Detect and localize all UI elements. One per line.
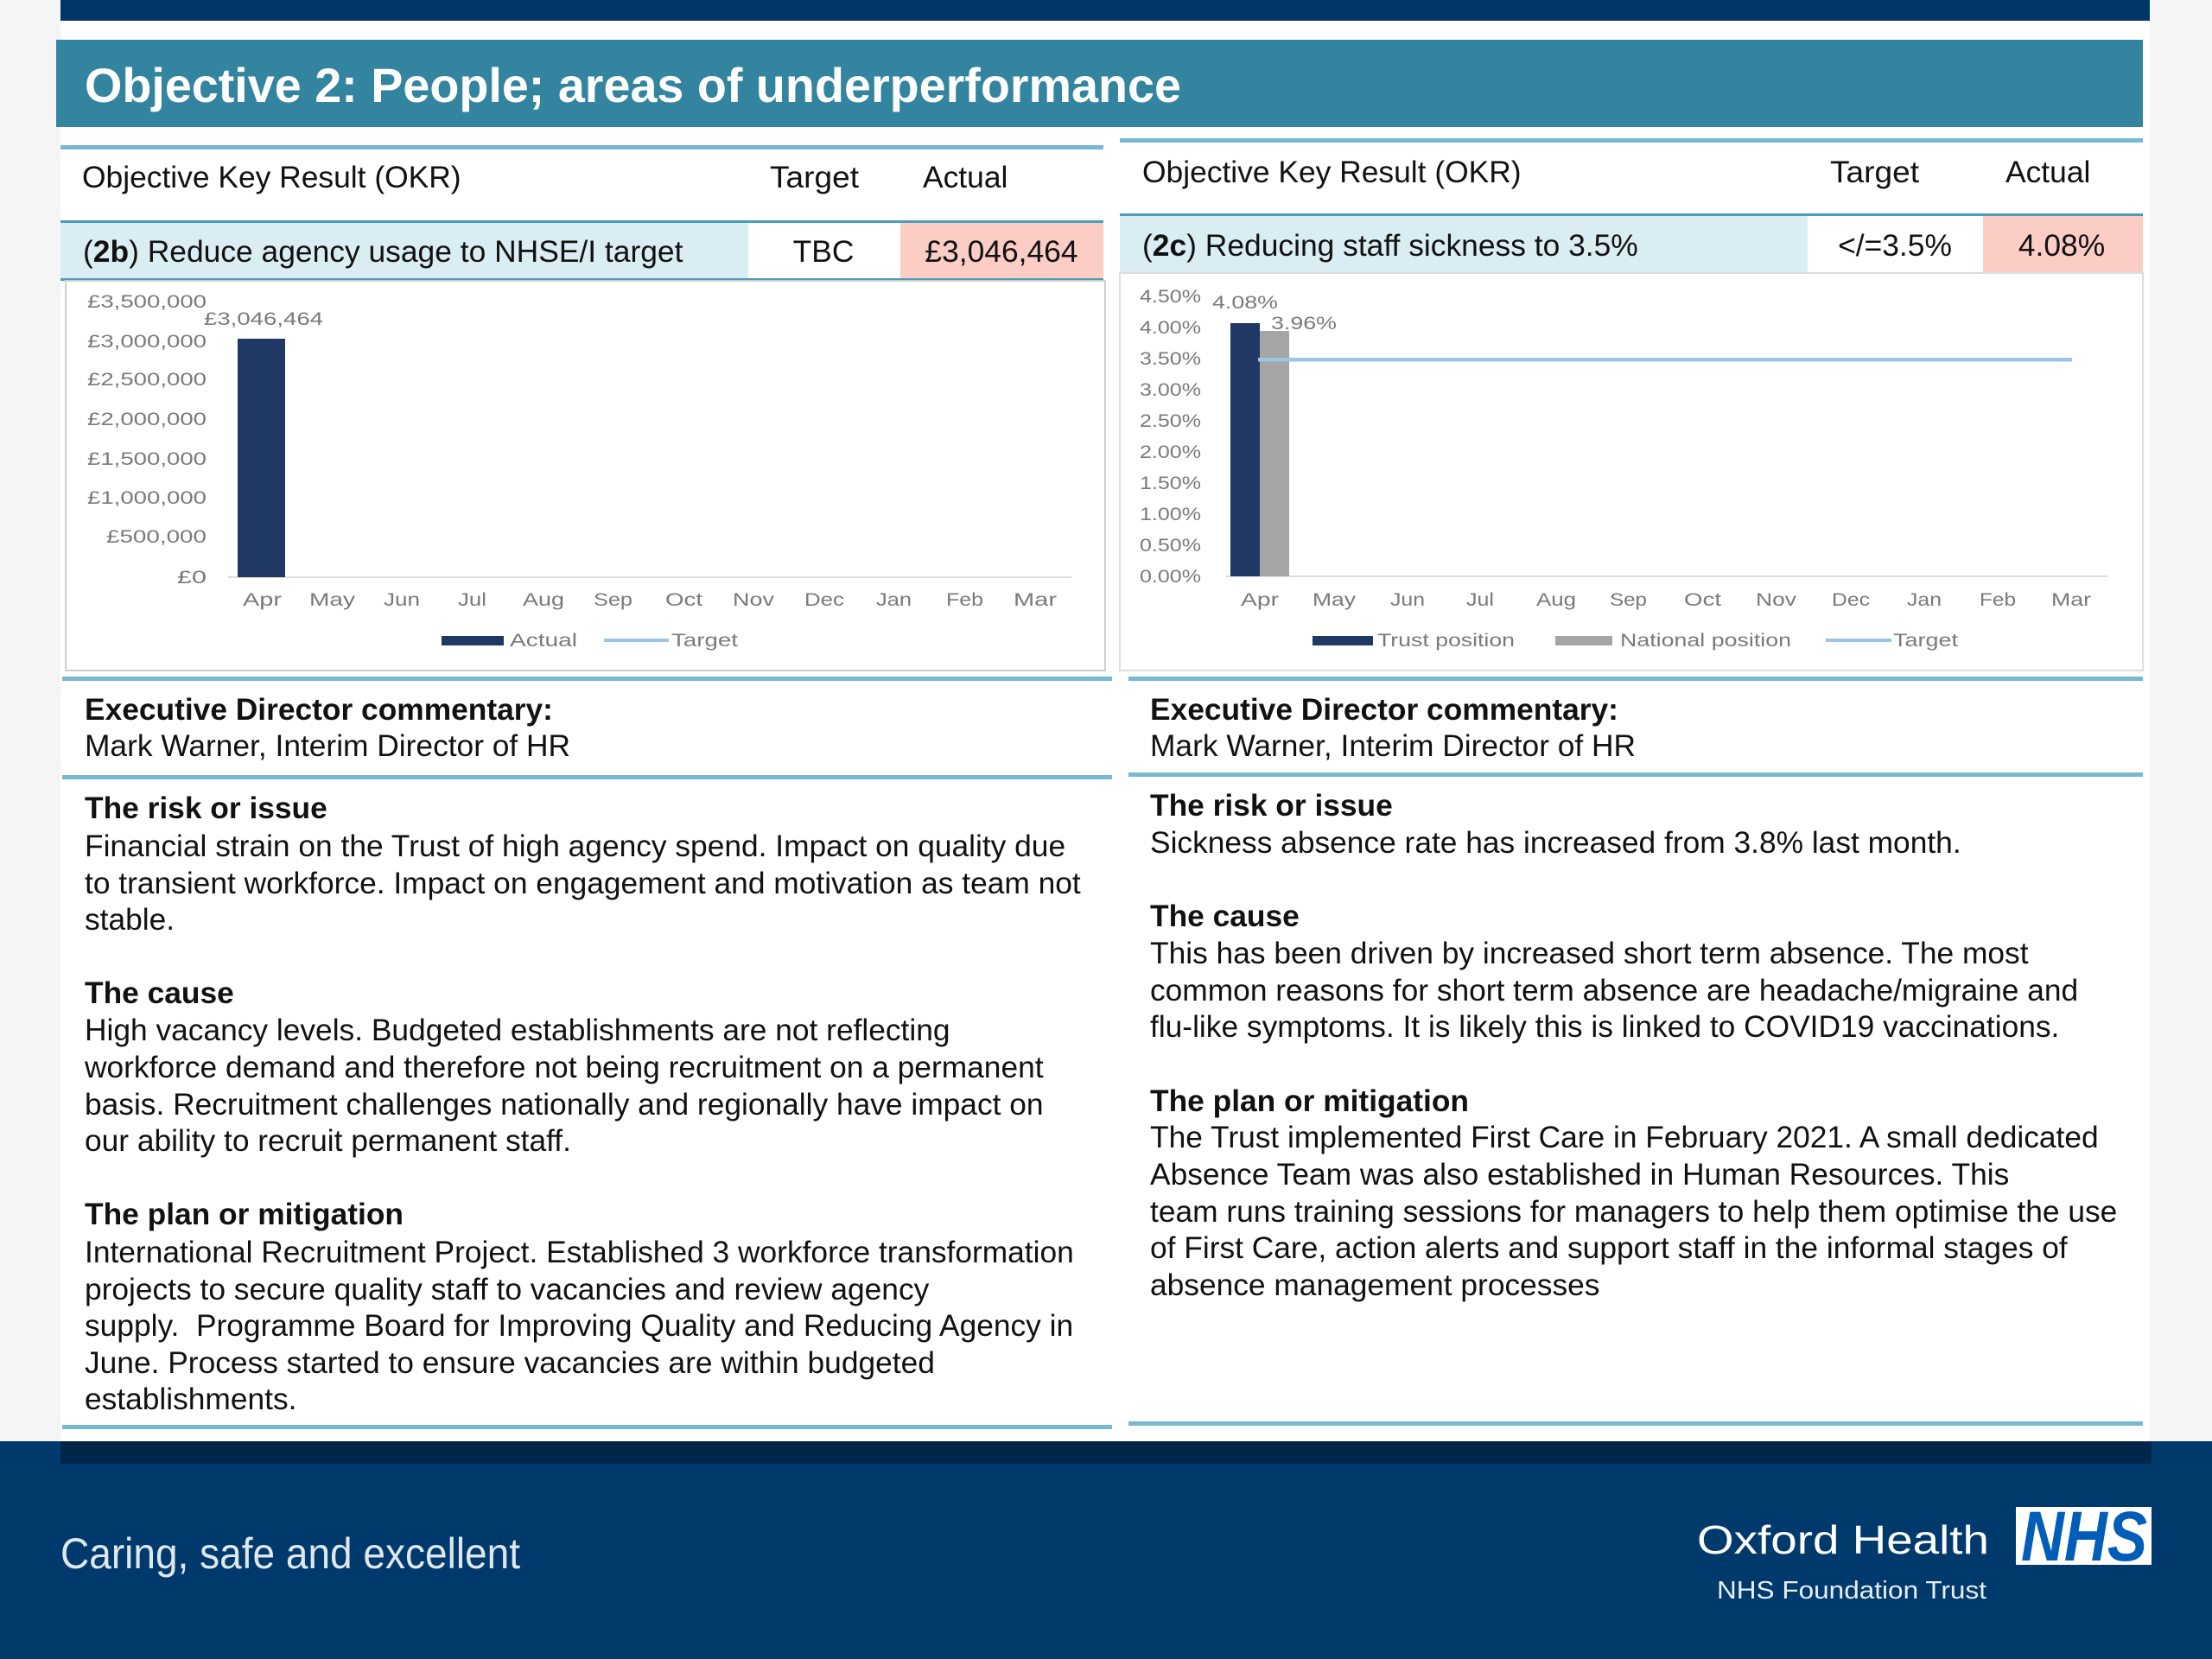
risk or issue 2b	[85, 791, 1081, 937]
chart legend: Actual	[510, 631, 577, 651]
executive director 2b: Mark Warner, Interim Director of HR	[85, 729, 570, 763]
executive director 2b: Executive Director commentary:	[85, 693, 553, 727]
plan or mitigation 2b: projects to secure quality staff to vacancies and review agency	[85, 1273, 930, 1306]
OKR 2b table header: Target	[770, 160, 859, 194]
y axis labels: 4.50%	[1140, 287, 1201, 307]
risk or issue 2b: to transient workforce. Impact on engagement and motivation as team not	[85, 867, 1081, 900]
y axis labels: 2.50%	[1140, 411, 1201, 431]
executive director 2c: Mark Warner, Interim Director of HR	[1150, 729, 1636, 763]
x axis months	[1241, 590, 2091, 610]
y axis labels: £1,500,000	[87, 449, 207, 469]
panel: commentary 2c	[1128, 677, 2143, 1426]
y axis labels: 0.00%	[1140, 567, 1201, 587]
risk or issue 2b: Financial strain on the Trust of high agency spend. Impact on quality due	[85, 830, 1065, 863]
top bar	[60, 0, 2150, 21]
cause 2b: basis. Recruitment challenges nationally and regionally have impact on	[85, 1088, 1044, 1122]
chart legend: Trust position	[1377, 631, 1515, 651]
OKR 2b table header: Objective Key Result (OKR)	[82, 160, 461, 194]
OKR 2c table header: Objective Key Result (OKR)	[1142, 155, 1522, 189]
chart legend: National position	[1620, 631, 1791, 651]
x axis months: Feb	[1980, 590, 2016, 610]
y axis labels: 3.00%	[1140, 380, 1201, 400]
y axis labels: 1.50%	[1140, 474, 1201, 493]
x axis months: Oct	[1684, 590, 1721, 610]
title banner	[56, 40, 2143, 127]
plan or mitigation 2b: June. Process started to ensure vacancies are within budgeted	[85, 1346, 935, 1380]
x axis months: Sep	[1610, 590, 1647, 610]
target line	[1258, 358, 2072, 361]
trust name: NHS Foundation Trust	[1717, 1577, 1986, 1605]
plan or mitigation 2c: absence management processes	[1150, 1268, 1599, 1302]
y axis labels: £0	[177, 568, 207, 588]
x axis months: Jul	[458, 590, 486, 610]
x axis months: Jan	[1907, 590, 1942, 610]
x axis months: Apr	[1241, 590, 1279, 610]
cause 2c: This has been driven by increased short term absence. The most	[1150, 937, 2029, 970]
x axis months	[243, 590, 1057, 610]
bar chart: agency spend	[66, 281, 1105, 671]
OKR 2b result row: £3,046,464	[925, 234, 1078, 269]
y axis labels: £2,000,000	[87, 410, 207, 429]
chart legend: Target	[671, 631, 738, 651]
plan or mitigation 2b: supply. Programme Board for Improving Quality and Reducing Agency in	[85, 1309, 1073, 1343]
bar: April actual	[238, 339, 285, 577]
trust name	[1697, 1517, 1989, 1605]
title banner: Objective 2: People; areas of underperformance	[85, 58, 1181, 112]
x axis months: Mar	[2051, 590, 2091, 610]
x axis months: Dec	[1832, 590, 1870, 610]
chart legend: Target	[1893, 631, 1958, 651]
y axis labels: £3,500,000	[87, 292, 207, 312]
x axis months: Feb	[946, 590, 983, 610]
plan or mitigation 2c	[1150, 1084, 2117, 1302]
cause 2c: flu-like symptoms. It is likely this is linked to COVID19 vaccinations.	[1150, 1010, 2059, 1044]
cause 2b: High vacancy levels. Budgeted establishments are not reflecting	[85, 1014, 950, 1047]
OKR 2c result row	[1120, 213, 2143, 272]
cause 2b: The cause	[85, 976, 234, 1010]
y axis labels	[1140, 287, 1201, 587]
y axis labels: 4.00%	[1140, 318, 1201, 338]
risk or issue 2c: Sickness absence rate has increased from 3.8% last month.	[1150, 826, 1961, 860]
x axis months: Dec	[804, 590, 844, 610]
x axis months: Apr	[243, 590, 282, 610]
risk or issue 2c: The risk or issue	[1150, 789, 1393, 823]
risk or issue 2c	[1150, 789, 1961, 860]
footer band	[0, 1441, 2212, 1659]
plan or mitigation 2c: The Trust implemented First Care in February 2021. A small dedicated	[1150, 1121, 2099, 1154]
plan or mitigation 2c: team runs training sessions for managers to help them optimise the use	[1150, 1195, 2117, 1229]
x axis months: Jun	[1390, 590, 1425, 610]
y axis labels: 1.00%	[1140, 505, 1201, 524]
data label: trust: 4.08%	[1212, 293, 1278, 313]
chart legend	[442, 631, 738, 651]
x axis months: May	[309, 590, 356, 610]
risk or issue 2b: The risk or issue	[85, 791, 327, 825]
y axis labels: £3,000,000	[87, 332, 207, 352]
cause 2b: our ability to recruit permanent staff.	[85, 1124, 571, 1158]
chart legend	[1313, 631, 1958, 651]
trust name: Oxford Health	[1697, 1517, 1989, 1562]
panel: OKR 2c	[1120, 138, 2143, 671]
plan or mitigation 2b: The plan or mitigation	[85, 1198, 404, 1231]
executive director 2b	[85, 693, 570, 763]
executive director 2c	[1150, 693, 1636, 763]
y axis labels: 3.50%	[1140, 349, 1201, 369]
plan or mitigation 2c: of First Care, action alerts and support staff in the informal stages of	[1150, 1231, 2068, 1265]
icon: NHS logo: NHS	[2021, 1497, 2147, 1576]
cause 2c: common reasons for short term absence are headache/migraine and	[1150, 974, 2078, 1007]
plan or mitigation 2c: The plan or mitigation	[1150, 1084, 1469, 1118]
plan or mitigation 2c: Absence Team was also established in Human Resources. This	[1150, 1158, 2009, 1192]
OKR 2c result row: 4.08%	[2018, 228, 2105, 263]
x axis months: Aug	[1536, 590, 1576, 610]
OKR 2c table header	[1142, 155, 2090, 189]
bar: trust position	[1230, 323, 1260, 576]
x axis months: Jun	[384, 590, 420, 610]
plan or mitigation 2b: International Recruitment Project. Established 3 workforce transformation	[85, 1236, 1074, 1269]
plan or mitigation 2b: establishments.	[85, 1382, 296, 1416]
panel: commentary 2b	[62, 677, 1112, 1429]
y axis labels: £2,500,000	[87, 370, 207, 390]
cause 2c	[1150, 899, 2078, 1044]
x axis months: Aug	[523, 590, 564, 610]
strapline: Caring, safe and excellent	[60, 1529, 520, 1578]
y axis labels: 2.00%	[1140, 442, 1201, 462]
x axis months: May	[1313, 590, 1357, 610]
OKR 2c table header: Actual	[2005, 155, 2090, 189]
panel: OKR 2b	[60, 145, 1105, 671]
data label: £3,046,464	[204, 309, 323, 329]
OKR 2b table header	[82, 160, 1007, 194]
x axis months: Mar	[1014, 590, 1057, 610]
y axis labels: £1,000,000	[87, 488, 207, 508]
OKR 2c result row: (2c) Reducing staff sickness to 3.5%	[1142, 228, 1638, 263]
x axis months: Oct	[665, 590, 702, 610]
OKR 2b result row	[60, 220, 1103, 281]
OKR 2b result row: TBC	[793, 234, 854, 269]
x axis months: Jul	[1466, 590, 1494, 610]
y axis labels	[87, 292, 207, 588]
y axis labels: 0.50%	[1140, 536, 1201, 556]
OKR 2c table header: Target	[1830, 155, 1919, 189]
cause 2c: The cause	[1150, 899, 1300, 933]
x axis months: Nov	[1756, 590, 1797, 610]
y axis labels: £500,000	[106, 527, 207, 547]
x axis months: Jan	[876, 590, 912, 610]
executive director 2c: Executive Director commentary:	[1150, 693, 1618, 727]
cause 2b	[84, 976, 1044, 1158]
risk or issue 2b: stable.	[85, 903, 175, 937]
x axis months: Sep	[594, 590, 632, 610]
OKR 2b table header: Actual	[923, 160, 1007, 194]
bar: national position	[1260, 331, 1289, 576]
bar chart: staff sickness	[1120, 273, 2143, 671]
OKR 2c result row: </=3.5%	[1838, 228, 1952, 263]
OKR 2b result row: (2b) Reduce agency usage to NHSE/I target	[83, 234, 683, 269]
data label: national: 3.96%	[1271, 314, 1337, 334]
plan or mitigation 2b	[85, 1198, 1074, 1416]
x axis months: Nov	[733, 590, 775, 610]
cause 2b: workforce demand and therefore not being recruitment on a permanent	[84, 1051, 1044, 1084]
